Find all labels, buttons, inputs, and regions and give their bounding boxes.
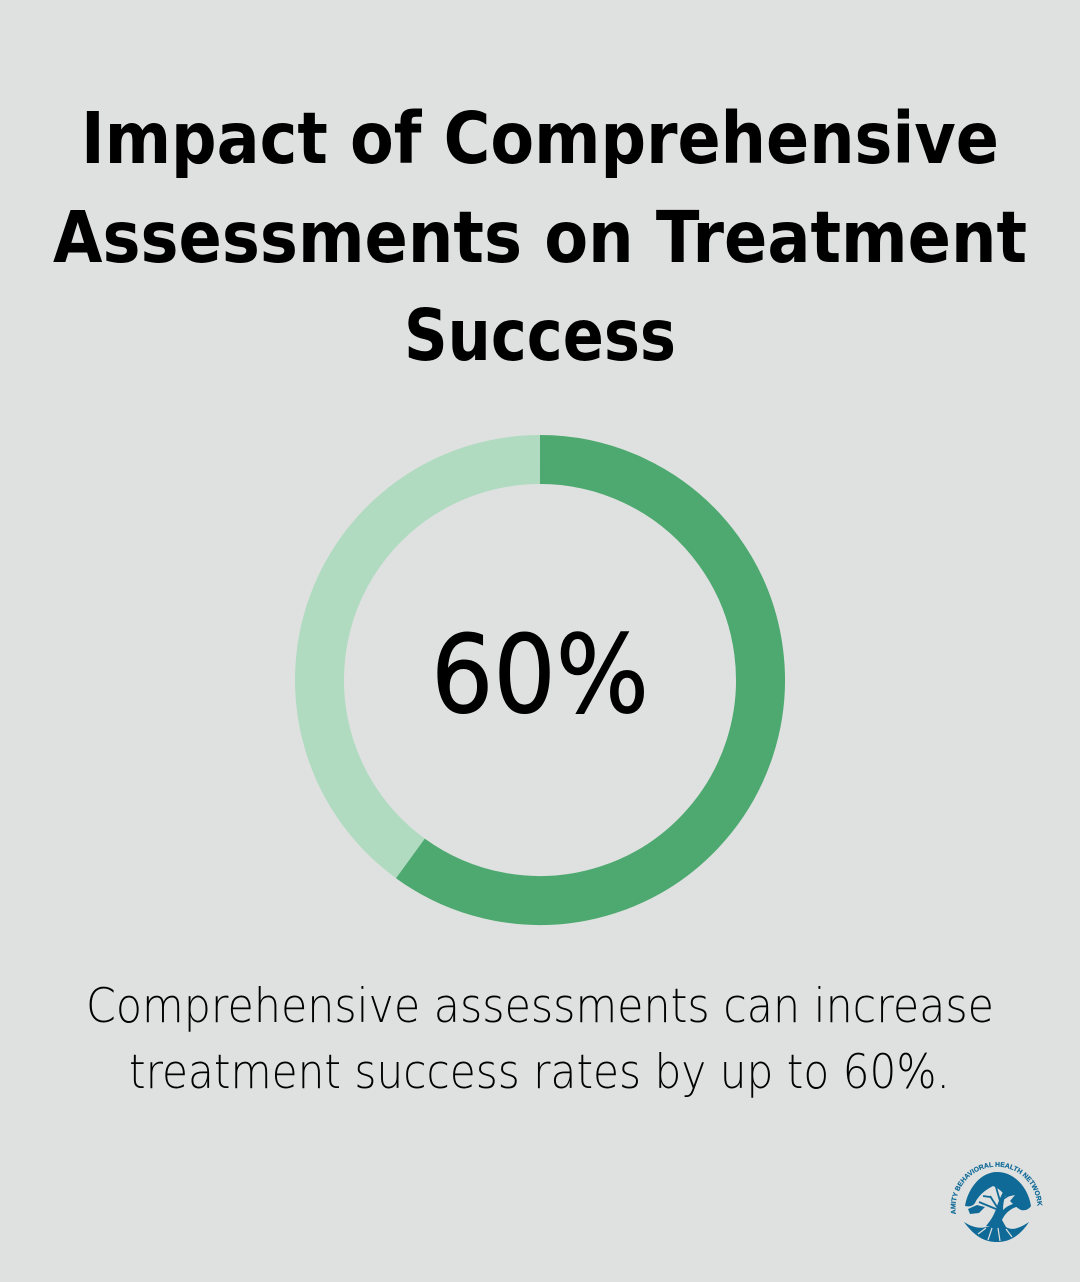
title: Success [404, 294, 676, 377]
logo roots arc [964, 1222, 1029, 1242]
title: Impact of Comprehensive [81, 97, 999, 180]
description text: treatment success rates by up to 60%. [129, 1045, 950, 1100]
remaining 40% ring segment [319, 460, 540, 858]
logo arc text [956, 1167, 1038, 1214]
donut chart: 60% [319, 460, 760, 900]
description text: Comprehensive assessments can increase [86, 979, 994, 1034]
logo tree trunk and branches [986, 1192, 1019, 1227]
center value: 60% [431, 613, 649, 738]
highlighted 60% ring segment [410, 460, 760, 900]
logo tree canopy [965, 1172, 1031, 1210]
logo: Amity Behavioral Health Network: AMITY BEHAVIORAL HEALTH NETWORK [950, 1162, 1042, 1214]
logo: Amity Behavioral Health Network [950, 1162, 1042, 1242]
description text [86, 979, 994, 1100]
title [53, 97, 1027, 377]
logo lower-left foliage [968, 1205, 985, 1214]
